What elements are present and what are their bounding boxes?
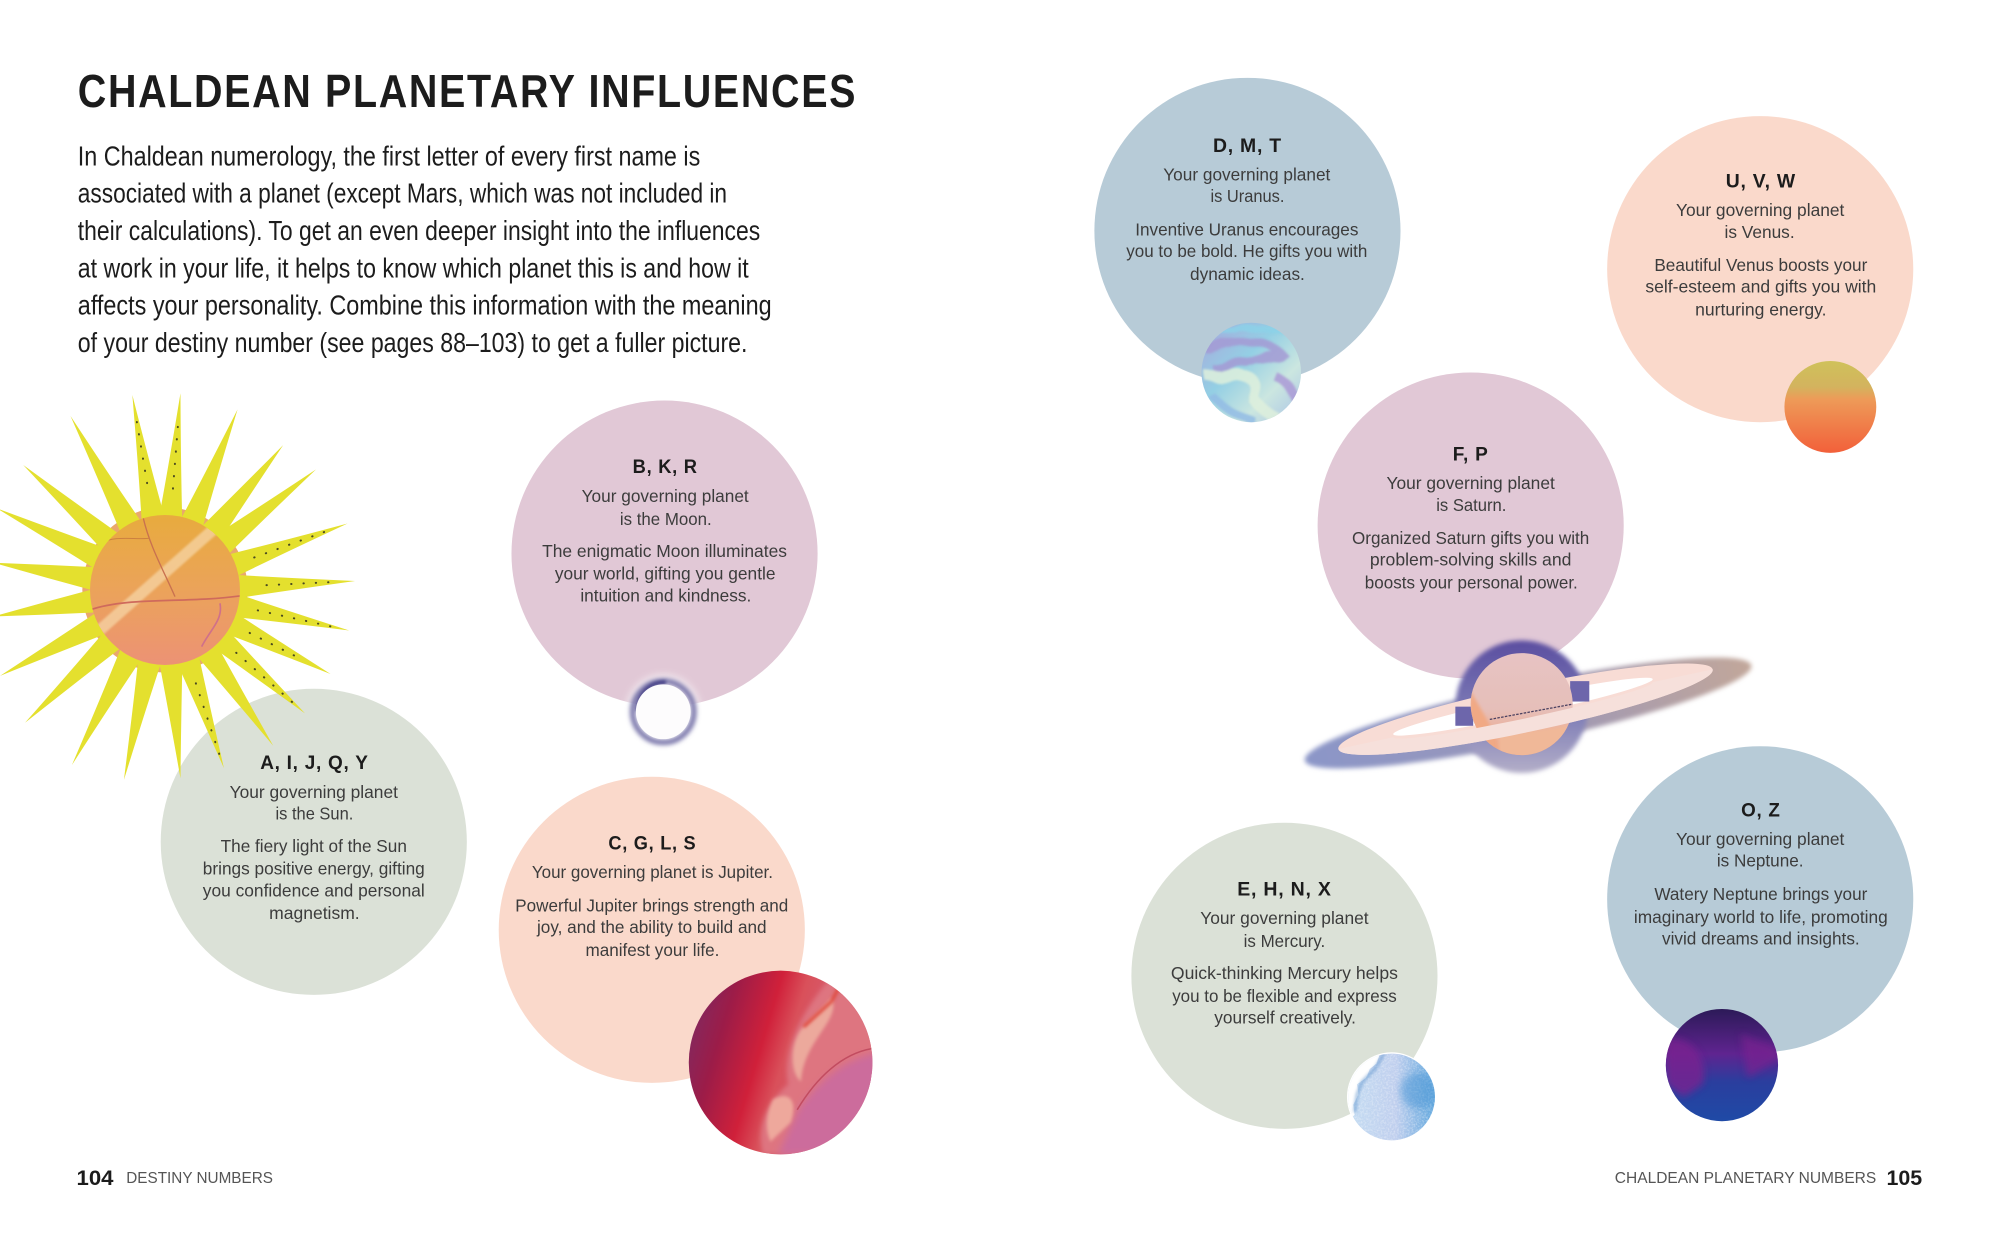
panel: C, G, L, S Jupiter card — [499, 777, 805, 1083]
description: Saturn: is Saturn. — [1436, 496, 1506, 515]
description: Mercury — [1171, 909, 1398, 1028]
panel: Sun circle background — [161, 689, 467, 995]
description: Sun — [203, 783, 425, 923]
intro paragraph: at work in your life, it helps to know which planet this is and how it — [78, 252, 749, 283]
description: Saturn: Organized Saturn gifts you with — [1352, 529, 1589, 548]
heading: A, I, J, Q, Y: A, I, J, Q, Y — [260, 752, 369, 774]
heading: O, Z: O, Z — [1741, 799, 1781, 821]
description: Venus: self-esteem and gifts you with — [1645, 278, 1876, 297]
intro paragraph: their calculations). To get an even deeper insight into the influences — [78, 215, 760, 246]
intro paragraph — [78, 140, 772, 358]
heading: D, M, T: D, M, T — [1213, 135, 1282, 157]
description: Neptune: Your governing planet — [1676, 830, 1845, 849]
footer: right page number — [1615, 1165, 1922, 1190]
description: Moon — [542, 487, 787, 605]
description: Jupiter — [515, 863, 788, 960]
description: Uranus: Inventive Uranus encourages — [1135, 220, 1358, 239]
description: Uranus: is Uranus. — [1210, 187, 1284, 206]
description: Sun: brings positive energy, gifting — [203, 859, 425, 878]
description: Neptune: is Neptune. — [1717, 852, 1804, 871]
description: Uranus: dynamic ideas. — [1190, 265, 1305, 284]
footer: right page number: CHALDEAN PLANETARY NUMBERS — [1615, 1170, 1876, 1187]
description: Venus: Beautiful Venus boosts your — [1654, 256, 1868, 275]
heading: U, V, W: U, V, W — [1726, 171, 1796, 193]
description: Mercury: Quick-thinking Mercury helps — [1171, 964, 1398, 983]
description: Sun: magnetism. — [269, 904, 360, 923]
description: Uranus — [1126, 165, 1367, 284]
intro paragraph: In Chaldean numerology, the first letter of every first name is — [78, 140, 700, 171]
heading: F, P: F, P — [1453, 443, 1489, 465]
intro paragraph: affects your personality. Combine this information with the meaning — [78, 290, 772, 321]
description: Mercury: you to be flexible and express — [1172, 987, 1397, 1006]
icon: Neptune — [1666, 1009, 1779, 1121]
description: Moon: your world, gifting you gentle — [555, 565, 776, 584]
description: Sun: The fiery light of the Sun — [221, 837, 407, 856]
title: CHALDEAN PLANETARY INFLUENCES — [78, 65, 857, 117]
description: Venus: nurturing energy. — [1695, 301, 1827, 320]
description: Jupiter: joy, and the ability to build and — [536, 918, 767, 937]
description: Neptune: vivid dreams and insights. — [1662, 930, 1860, 949]
description: Saturn: problem-solving skills and — [1370, 551, 1571, 570]
description: Moon: is the Moon. — [620, 510, 712, 529]
heading: C, G, L, S: C, G, L, S — [608, 833, 696, 855]
icon: Uranus — [1202, 323, 1304, 423]
description: Venus: is Venus. — [1724, 223, 1795, 242]
panel: O, Z Neptune card — [1607, 746, 1913, 1052]
description: Sun: Your governing planet — [230, 783, 398, 802]
footer: left page number: 104 — [77, 1165, 114, 1190]
description: Saturn: Your governing planet — [1386, 474, 1555, 493]
panel: A, I, J, Q, Y card text — [203, 752, 425, 923]
intro paragraph: of your destiny number (see pages 88–103) to get a fuller picture. — [78, 327, 747, 358]
description: Saturn: boosts your personal power. — [1365, 574, 1578, 593]
panel: E, H, N, X Mercury card — [1131, 823, 1438, 1129]
description: Saturn — [1352, 474, 1589, 593]
panel: U, V, W Venus card — [1607, 116, 1913, 422]
footer: left page number: DESTINY NUMBERS — [126, 1170, 273, 1187]
description: Moon: Your governing planet — [582, 487, 749, 506]
footer: left page number — [77, 1165, 273, 1190]
description: Jupiter: Your governing planet is Jupiter. — [532, 863, 773, 882]
description: Uranus: Your governing planet — [1163, 165, 1331, 184]
intro paragraph: associated with a planet (except Mars, which was not included in — [78, 178, 727, 209]
panel: B, K, R Moon card — [511, 401, 818, 707]
panel: F, P Saturn card — [1318, 372, 1624, 679]
icon: Mercury — [1347, 1051, 1436, 1142]
dark block behind planet: left — [1455, 707, 1473, 726]
heading: E, H, N, X: E, H, N, X — [1237, 878, 1332, 900]
description: Neptune: Watery Neptune brings your — [1654, 885, 1868, 904]
icon: Moon — [626, 675, 700, 749]
description: Venus — [1645, 201, 1876, 320]
description: Mercury: yourself creatively. — [1214, 1009, 1356, 1028]
icon: Jupiter — [689, 969, 880, 1154]
description: Neptune — [1634, 830, 1888, 949]
description: Uranus: you to be bold. He gifts you with — [1126, 242, 1367, 261]
description: Neptune: imaginary world to life, promoting — [1634, 908, 1888, 927]
heading: B, K, R: B, K, R — [633, 456, 698, 478]
dark block behind planet: right — [1570, 681, 1589, 702]
icon: Saturn with rings — [1302, 637, 1754, 776]
description: Sun: you confidence and personal — [203, 882, 425, 901]
footer: right page number: 105 — [1886, 1165, 1922, 1190]
description: Jupiter: Powerful Jupiter brings strength and — [515, 896, 788, 915]
description: Moon: intuition and kindness. — [580, 586, 751, 605]
icon: Venus — [1784, 361, 1876, 453]
description: Moon: The enigmatic Moon illuminates — [542, 542, 787, 561]
description: Jupiter: manifest your life. — [585, 941, 719, 960]
description: Venus: Your governing planet — [1676, 201, 1845, 220]
description: Mercury: is Mercury. — [1244, 932, 1325, 951]
description: Sun: is the Sun. — [276, 805, 353, 824]
icon: Sun illustration — [0, 392, 356, 782]
description: Mercury: Your governing planet — [1200, 909, 1369, 928]
panel: D, M, T Uranus card — [1094, 78, 1401, 384]
